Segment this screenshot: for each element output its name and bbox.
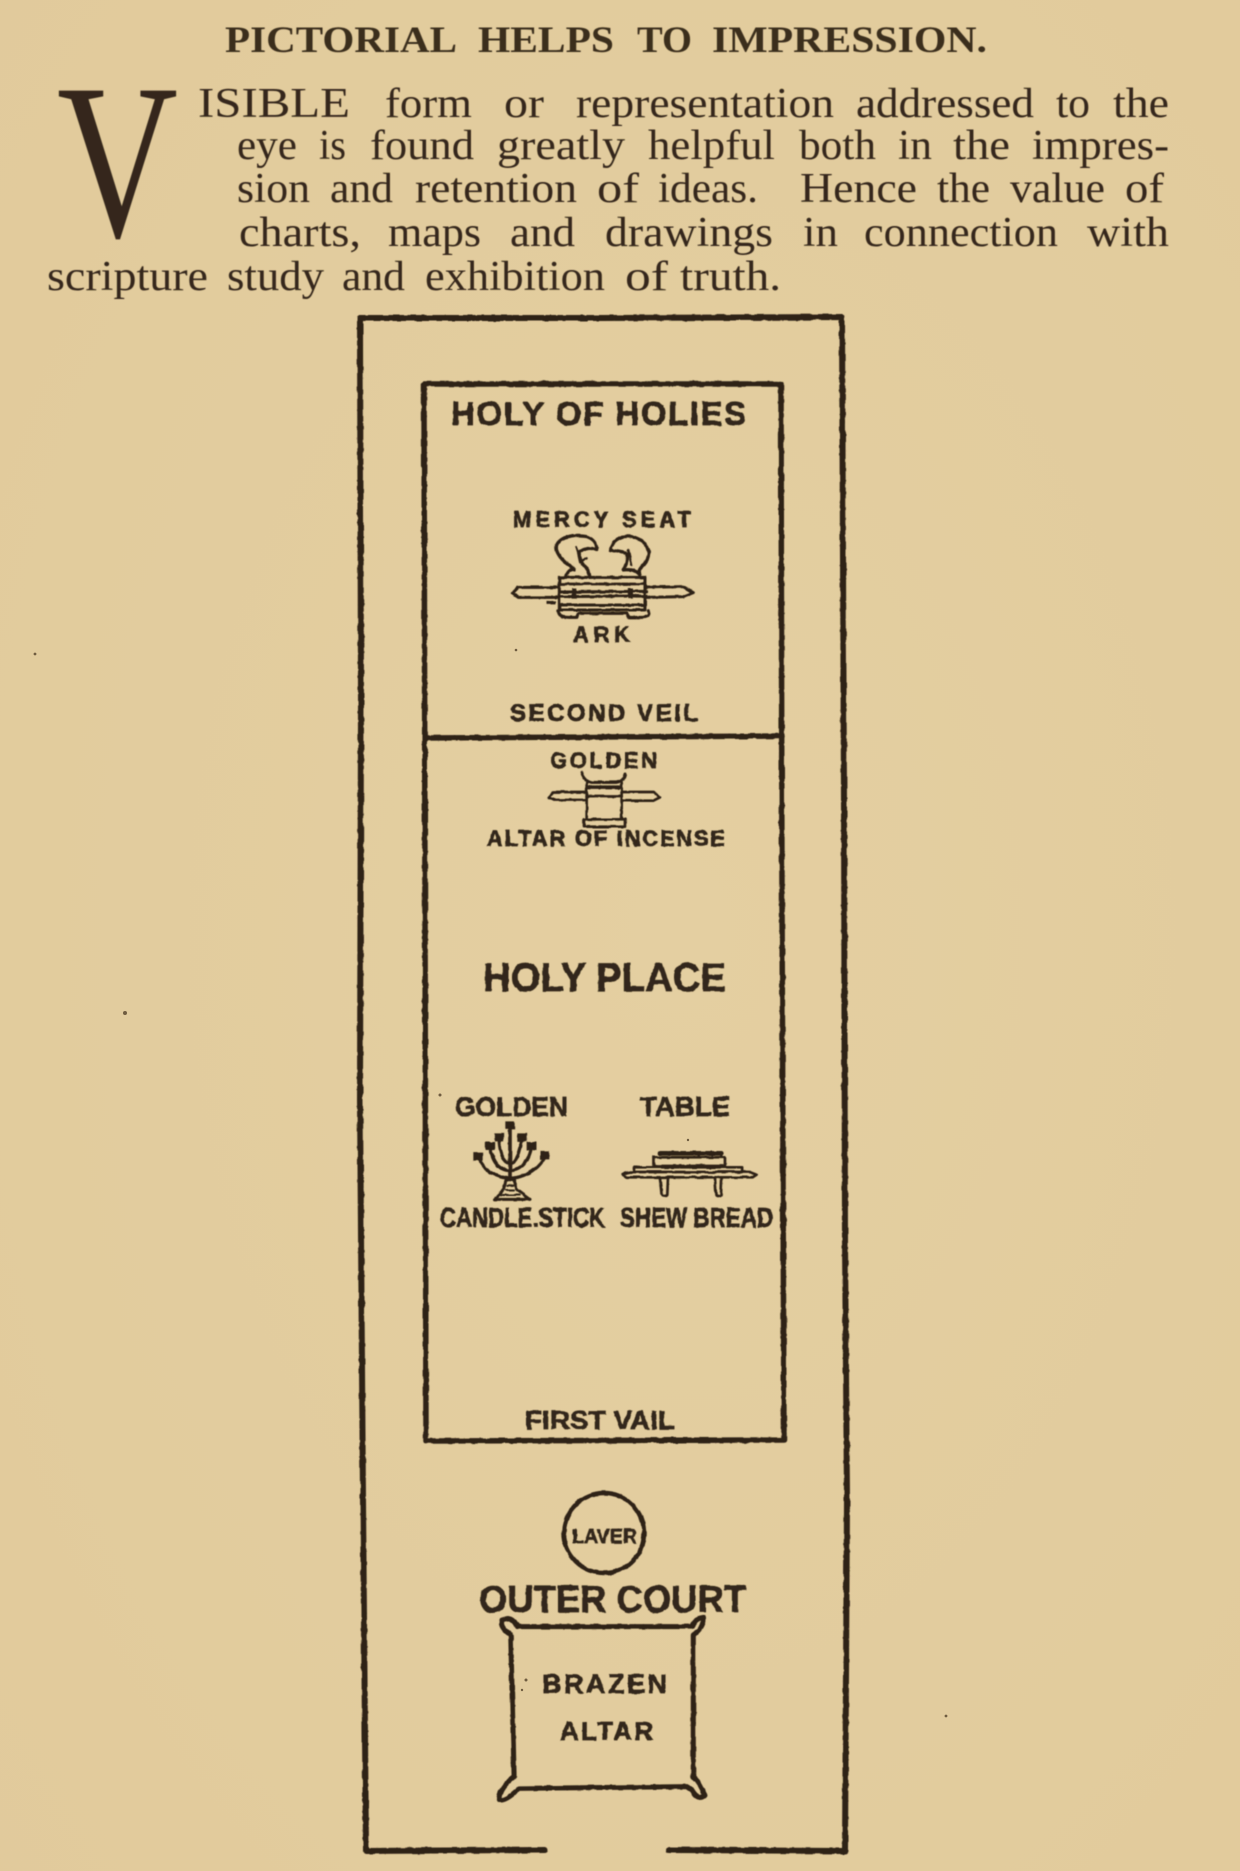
title [225,20,987,61]
intro paragraph: both [799,123,876,169]
label: brazen: BRAZEN [542,1669,667,1699]
intro paragraph: in [898,123,932,169]
title: HELPS [478,20,614,61]
label: laver: LAVER [572,1526,638,1548]
intro paragraph: with [1087,210,1169,256]
intro paragraph: helpful [648,123,775,169]
brazen altar box [499,1617,704,1800]
intro paragraph: or [504,81,544,127]
intro paragraph: eye [237,123,297,169]
icon: table of shewbread [623,1153,757,1196]
intro paragraph: representation [576,81,834,127]
label: second veil: SECOND VEIL [510,700,698,727]
label: ark: ARK [573,622,630,647]
intro paragraph: addressed [856,81,1034,127]
label: altar: ALTAR [560,1716,653,1746]
intro paragraph: connection [864,210,1058,256]
intro paragraph: is [319,123,346,169]
intro paragraph: value [1010,166,1105,212]
label: holy place: HOLY PLACE [483,956,726,1000]
label: golden (altar): GOLDEN [550,748,657,773]
label: shew bread: SHEW BREAD [620,1202,773,1233]
intro paragraph: exhibition [425,254,605,300]
intro paragraph: of [1125,166,1164,212]
intro paragraph: ideas. [658,166,758,212]
intro paragraph: and [510,210,575,256]
drop cap V: V [57,39,178,285]
intro paragraph: to [1056,81,1090,127]
intro paragraph: study [227,254,324,300]
icon: ark of the covenant [512,536,693,617]
label: first vail: FIRST VAIL [525,1405,675,1435]
intro paragraph: in [803,210,838,256]
label: outer court: OUTER COURT [479,1579,746,1621]
title: PICTORIAL [225,20,457,61]
intro paragraph: of [625,254,668,300]
intro paragraph: Hence [800,166,917,212]
label: holy of holies: HOLY OF HOLIES [451,395,746,432]
icon: altar of incense [548,773,660,827]
title: IMPRESSION. [712,20,987,61]
page specks [34,649,947,1717]
title: TO [637,20,692,61]
intro paragraph: retention [415,166,577,212]
intro paragraph: and [330,166,393,212]
label: golden (candlestick): GOLDEN [455,1092,568,1122]
intro paragraph [47,81,1169,300]
intro paragraph: sion [237,166,310,212]
label: altar of incense: ALTAR OF INCENSE [487,826,725,851]
intro paragraph: charts, [239,210,361,256]
intro paragraph: and [342,254,405,300]
label: table: TABLE [640,1091,730,1122]
intro paragraph: the [937,166,990,212]
sanctuary walls [424,384,784,1441]
intro paragraph: truth. [680,254,781,300]
icon: golden candlestick [473,1121,549,1199]
laver circle [564,1493,644,1573]
label: candlestick: CANDLE.STICK [440,1202,605,1233]
intro paragraph: form [385,81,472,127]
label: mercy seat: MERCY SEAT [513,507,692,532]
intro paragraph: found [370,123,474,169]
intro paragraph: of [597,166,639,212]
intro paragraph: scripture [47,254,208,300]
intro paragraph: drawings [605,210,773,256]
intro paragraph: greatly [497,123,625,169]
outer court wall [360,317,847,1851]
intro paragraph: ISIBLE [198,81,350,127]
intro paragraph: the [1113,81,1169,127]
intro paragraph: impres- [1032,123,1169,169]
second veil divider [425,736,782,738]
tabernacle plan diagram [360,317,847,1851]
intro paragraph: the [953,123,1010,169]
intro paragraph: maps [388,210,481,256]
